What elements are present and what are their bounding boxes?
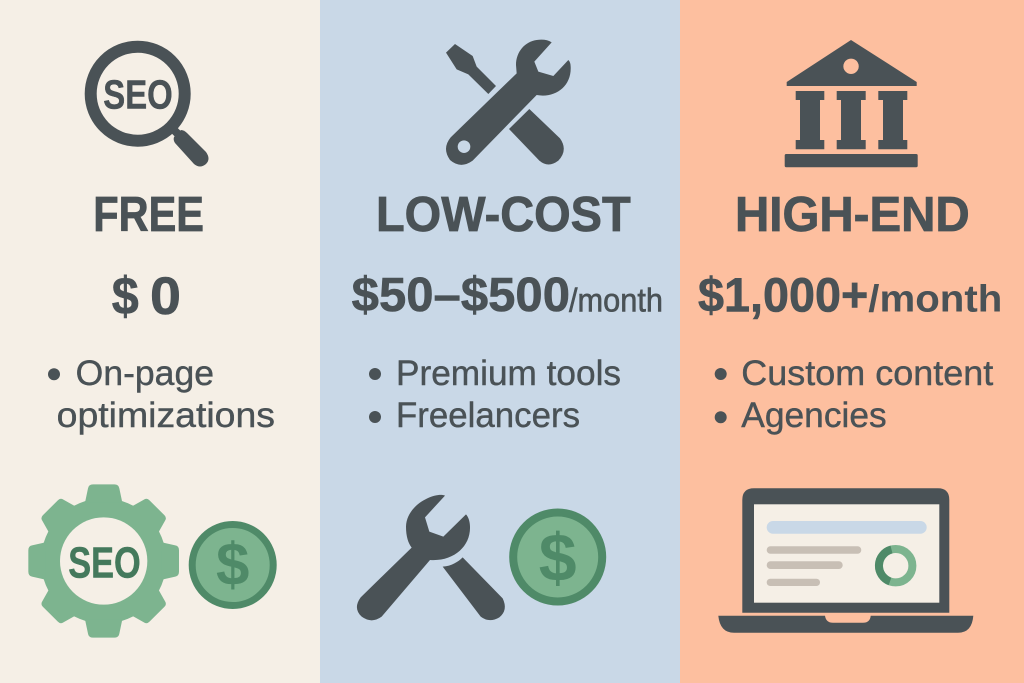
panel background: cream (0, 0, 320, 683)
icon: dollar coin: $ (216, 531, 249, 598)
bullet list: high-end: Agencies (741, 396, 887, 435)
icon: institution building (785, 40, 918, 167)
panel background: blue (320, 0, 680, 683)
price: $1,000+/month: $1,000+ (698, 270, 868, 323)
panel: high-end (680, 0, 1024, 683)
heading: LOW-COST: LOW-COST (376, 188, 631, 242)
bullet list: free: On-page (76, 354, 214, 393)
bullet list: low-cost: Freelancers (396, 396, 580, 435)
bullet list: high-end: Custom content (741, 354, 994, 393)
icon: green SEO gear (28, 484, 179, 638)
icon: dollar coin: $ (539, 520, 577, 596)
panel: low-cost (320, 0, 680, 683)
price: $50–$500/month (352, 269, 663, 322)
icon: wrench and handle (357, 495, 505, 620)
icon: laptop dashboard (718, 488, 973, 633)
heading: HIGH-END: HIGH-END (735, 188, 970, 242)
price: $50–$500/month: /month (569, 282, 663, 319)
price: $50–$500/month: $50–$500 (352, 269, 570, 322)
bullet list: low-cost: Premium tools (396, 354, 621, 393)
heading: FREE: FREE (93, 188, 204, 242)
icon: SEO magnifying glass: SEO (103, 71, 173, 117)
bullet list: free (48, 354, 275, 435)
price: $1,000+/month (698, 270, 1002, 323)
bullet list: free: optimizations (57, 396, 275, 435)
panel background: peach (680, 0, 1024, 683)
price: $0: 0 (150, 267, 181, 326)
gear label: SEO: SEO (68, 539, 141, 588)
bullet list: high-end (715, 354, 994, 435)
icon: dollar coin (192, 524, 273, 606)
price: $0: $ (112, 267, 139, 326)
icon: crossed wrench and screwdriver (446, 40, 571, 165)
price: $1,000+/month: /month (868, 279, 1002, 321)
icon: SEO magnifying glass (91, 47, 208, 166)
panel: free (0, 0, 320, 683)
price: $0 (112, 267, 181, 326)
bullet list: low-cost (369, 354, 621, 435)
icon: dollar coin (513, 512, 602, 602)
